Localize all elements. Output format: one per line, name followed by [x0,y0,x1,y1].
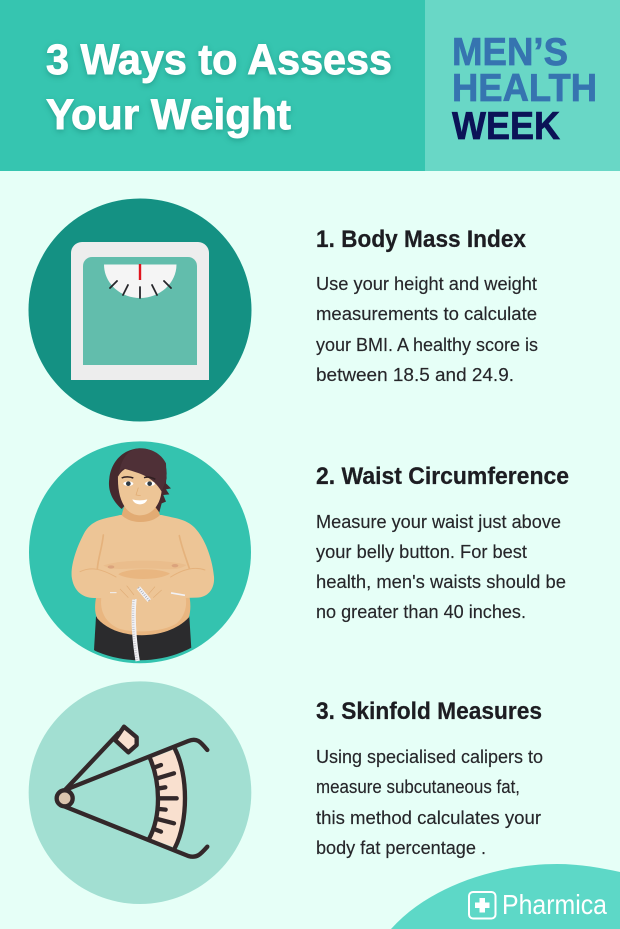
panel: Men's Health Week logo [425,0,620,171]
heading: Body Mass Index: 1. Body Mass Index [316,226,526,253]
belly [95,592,190,635]
brand name: Pharmica [502,889,607,920]
fringe [118,449,167,492]
heading: Skinfold Measures: 3. Skinfold Measures [316,698,542,725]
text block: waist description: your belly button. For best [316,541,527,562]
title: Your Weight [46,91,291,139]
header banner [0,0,425,171]
text block: waist description: no greater than 40 inches. [316,601,526,622]
panel: Men's Health Week logo: WEEK [452,105,560,148]
text block: BMI description [316,273,538,385]
text block: skinfold description: body fat percentage . [316,837,486,858]
text block: BMI description: between 18.5 and 24.9. [316,364,514,385]
text block: BMI description: your BMI. A healthy score is [316,334,538,355]
title [46,36,392,139]
text block: skinfold description: measure subcutaneous fat, [316,776,520,797]
neck [122,507,160,522]
face [122,477,155,504]
text block: waist description [316,511,566,622]
panel: Men's Health Week logo: HEALTH [452,67,597,110]
text block: skinfold description [316,746,543,858]
icon: bathroom scale [28,198,252,422]
text block: BMI description: Use your height and weight [316,273,537,294]
icon: skinfold calipers [29,681,251,904]
text block: skinfold description: this method calculates your [316,807,541,828]
title: 3 Ways to Assess [46,36,392,84]
icon: Pharmica cross [469,892,496,918]
tape twist [138,588,149,601]
heading: Waist Circumference: 2. Waist Circumference [316,463,569,490]
hands [117,584,170,600]
icon: man measuring waist [29,441,251,664]
text block: skinfold description: Using specialised calipers to [316,746,543,767]
text block: waist description: Measure your waist just above [316,511,561,532]
torso and arms [72,515,214,598]
text block: BMI description: measurements to calculate [316,303,537,324]
text block: waist description: health, men's waists should be [316,571,566,592]
head [118,466,162,515]
chest shading [80,535,205,577]
tape measure [110,593,185,661]
panel: Men's Health Week logo: MEN’S [452,31,568,74]
footer: Pharmica brand corner [391,864,620,929]
shorts [94,617,191,664]
back hair [109,448,171,512]
